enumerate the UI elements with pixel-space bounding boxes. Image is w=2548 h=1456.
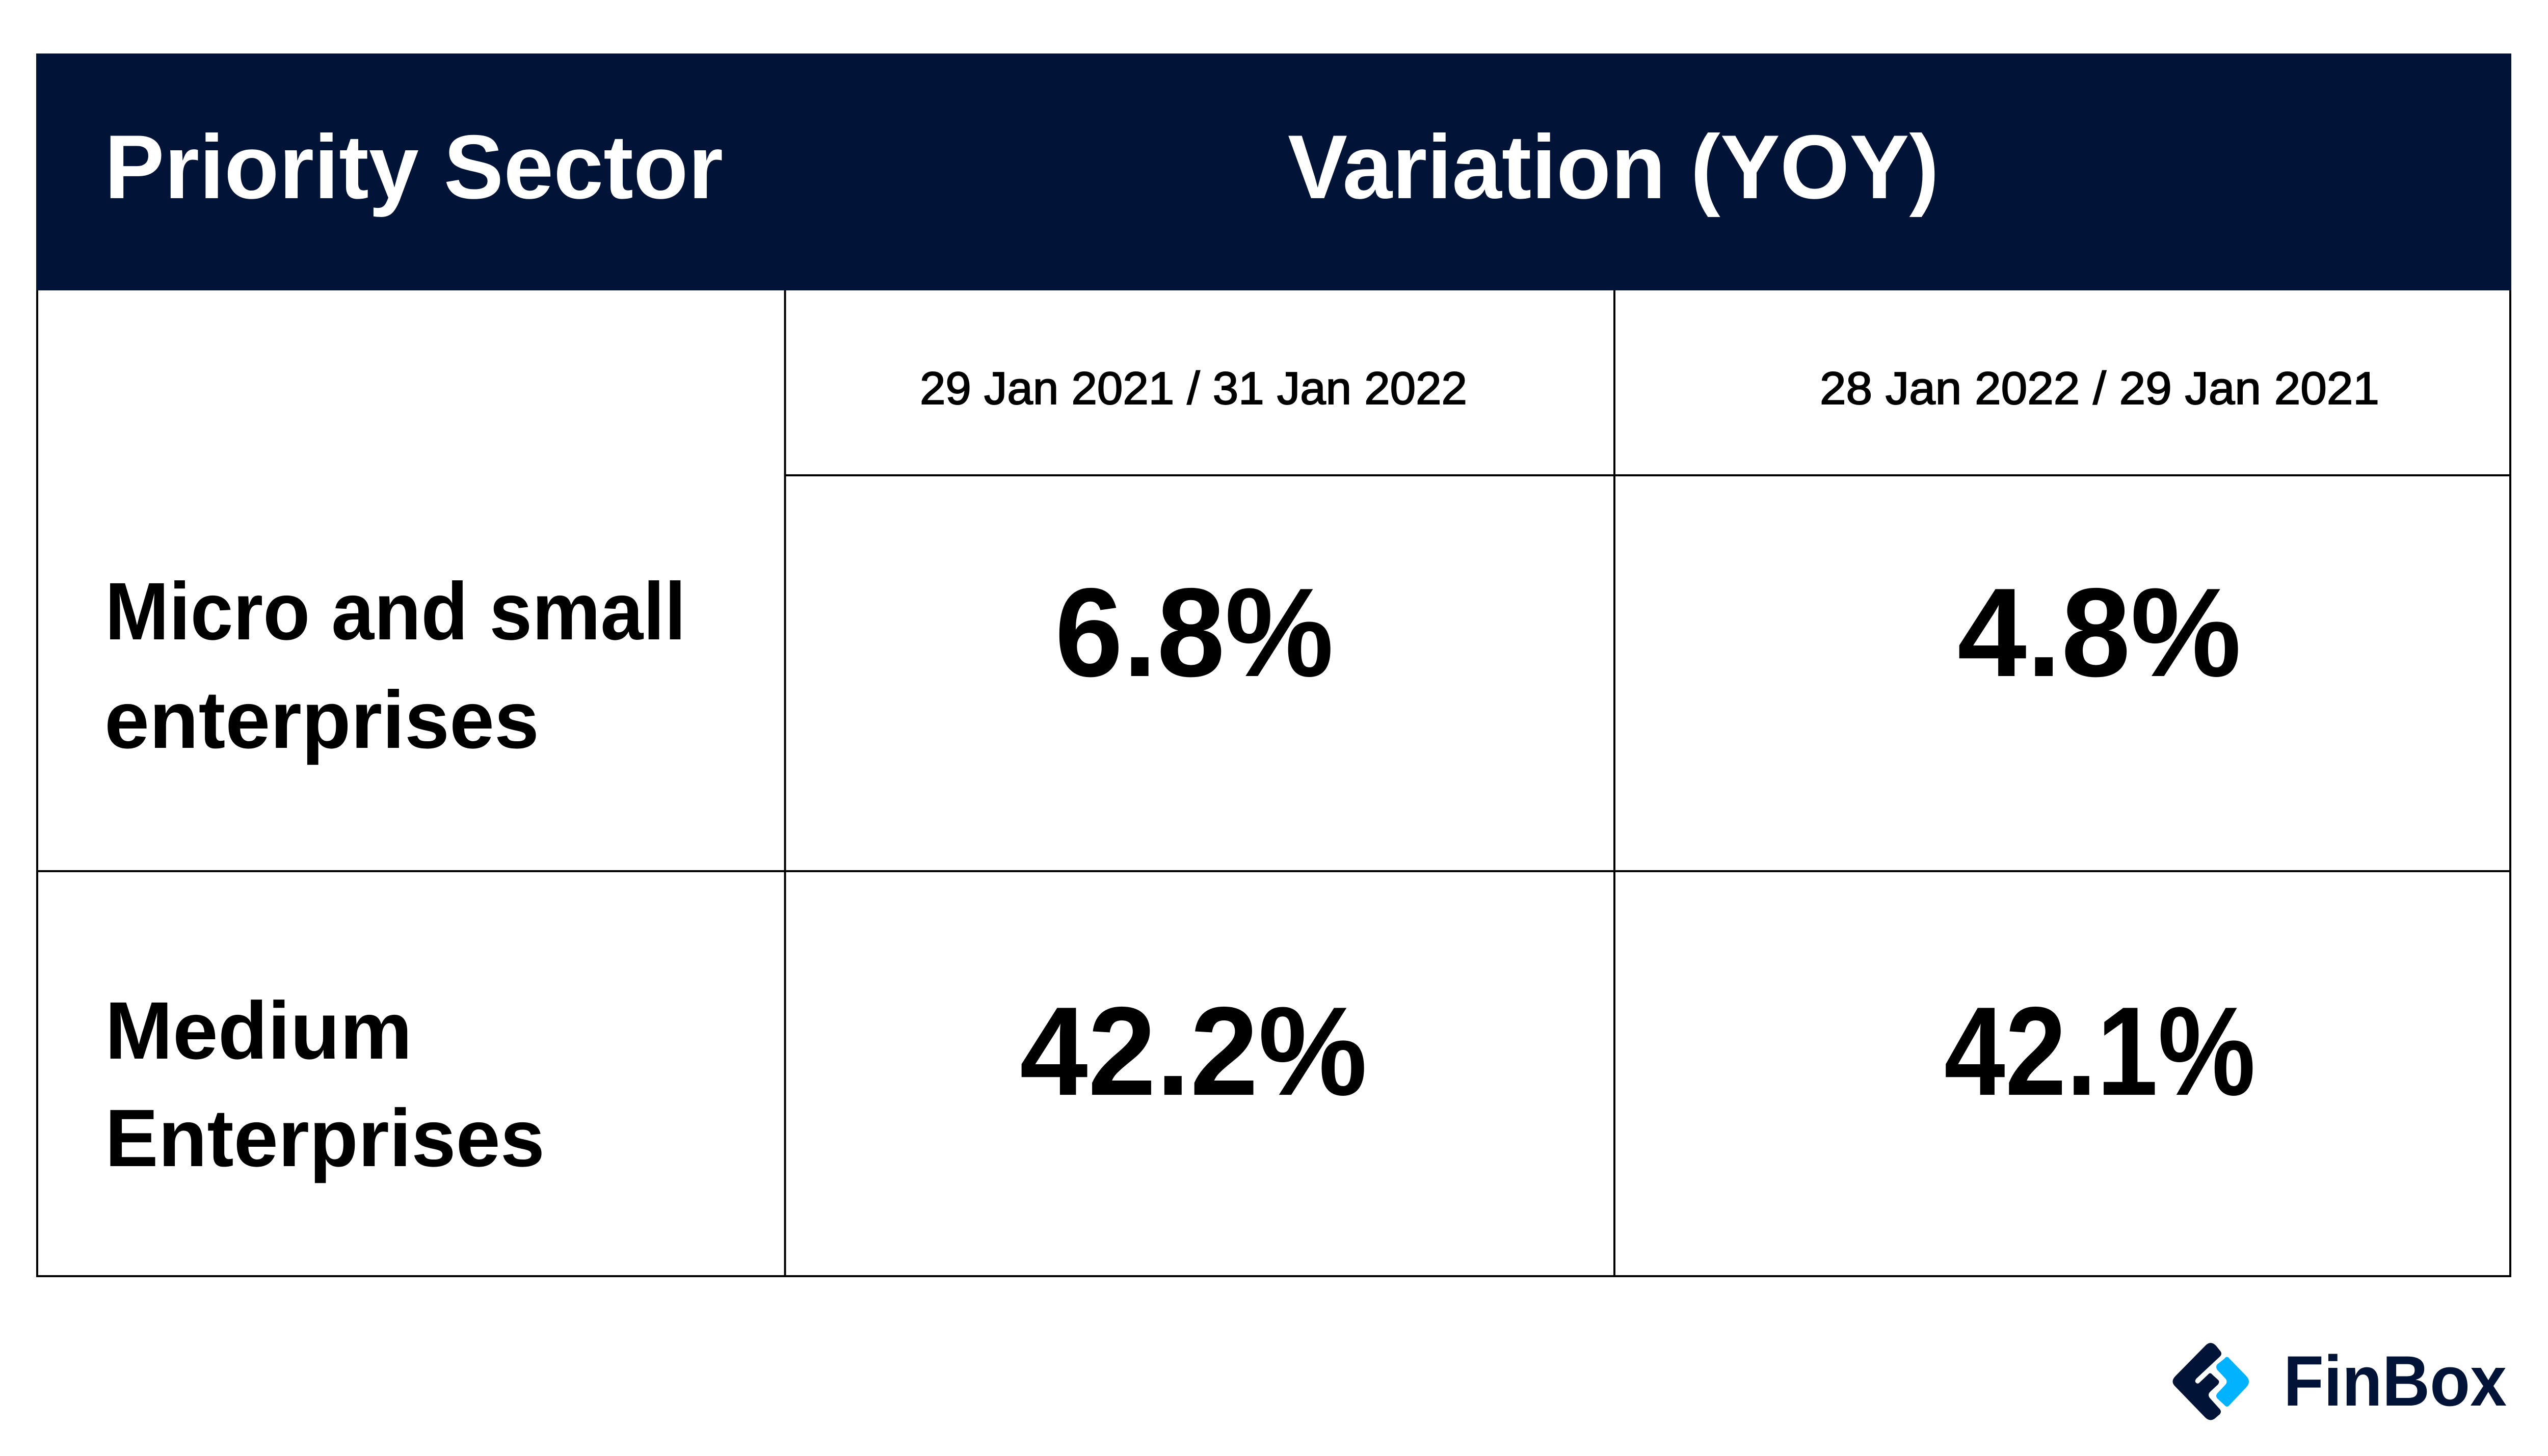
row label: micro and small enterprises: Micro and small	[105, 565, 686, 657]
column date label two: 28 Jan 2022 / 29 Jan 2021	[1820, 363, 2379, 414]
column date label one: 29 Jan 2021 / 31 Jan 2022	[920, 363, 1467, 414]
row label: micro and small enterprises: enterprises	[104, 674, 539, 765]
row label: micro and small enterprises	[104, 565, 686, 765]
row label: medium enterprises: Enterprises	[105, 1092, 545, 1183]
heading: variation yoy: Variation (YOY)	[1288, 116, 1939, 218]
icon: FinBox mark	[2173, 1343, 2249, 1420]
row label: medium enterprises	[105, 985, 545, 1183]
logo: FinBox	[2173, 1341, 2507, 1421]
value: medium, second period: 42.1%	[1944, 980, 2255, 1122]
heading: priority sector: Priority Sector	[104, 116, 723, 218]
table header band	[36, 53, 2511, 290]
wordmark: FinBox	[2284, 1341, 2507, 1421]
row label: medium enterprises: Medium	[105, 985, 412, 1076]
value: micro and small, second period: 4.8%	[1957, 561, 2241, 703]
value: micro and small, first period: 6.8%	[1055, 561, 1334, 703]
value: medium, first period: 42.2%	[1020, 980, 1367, 1122]
